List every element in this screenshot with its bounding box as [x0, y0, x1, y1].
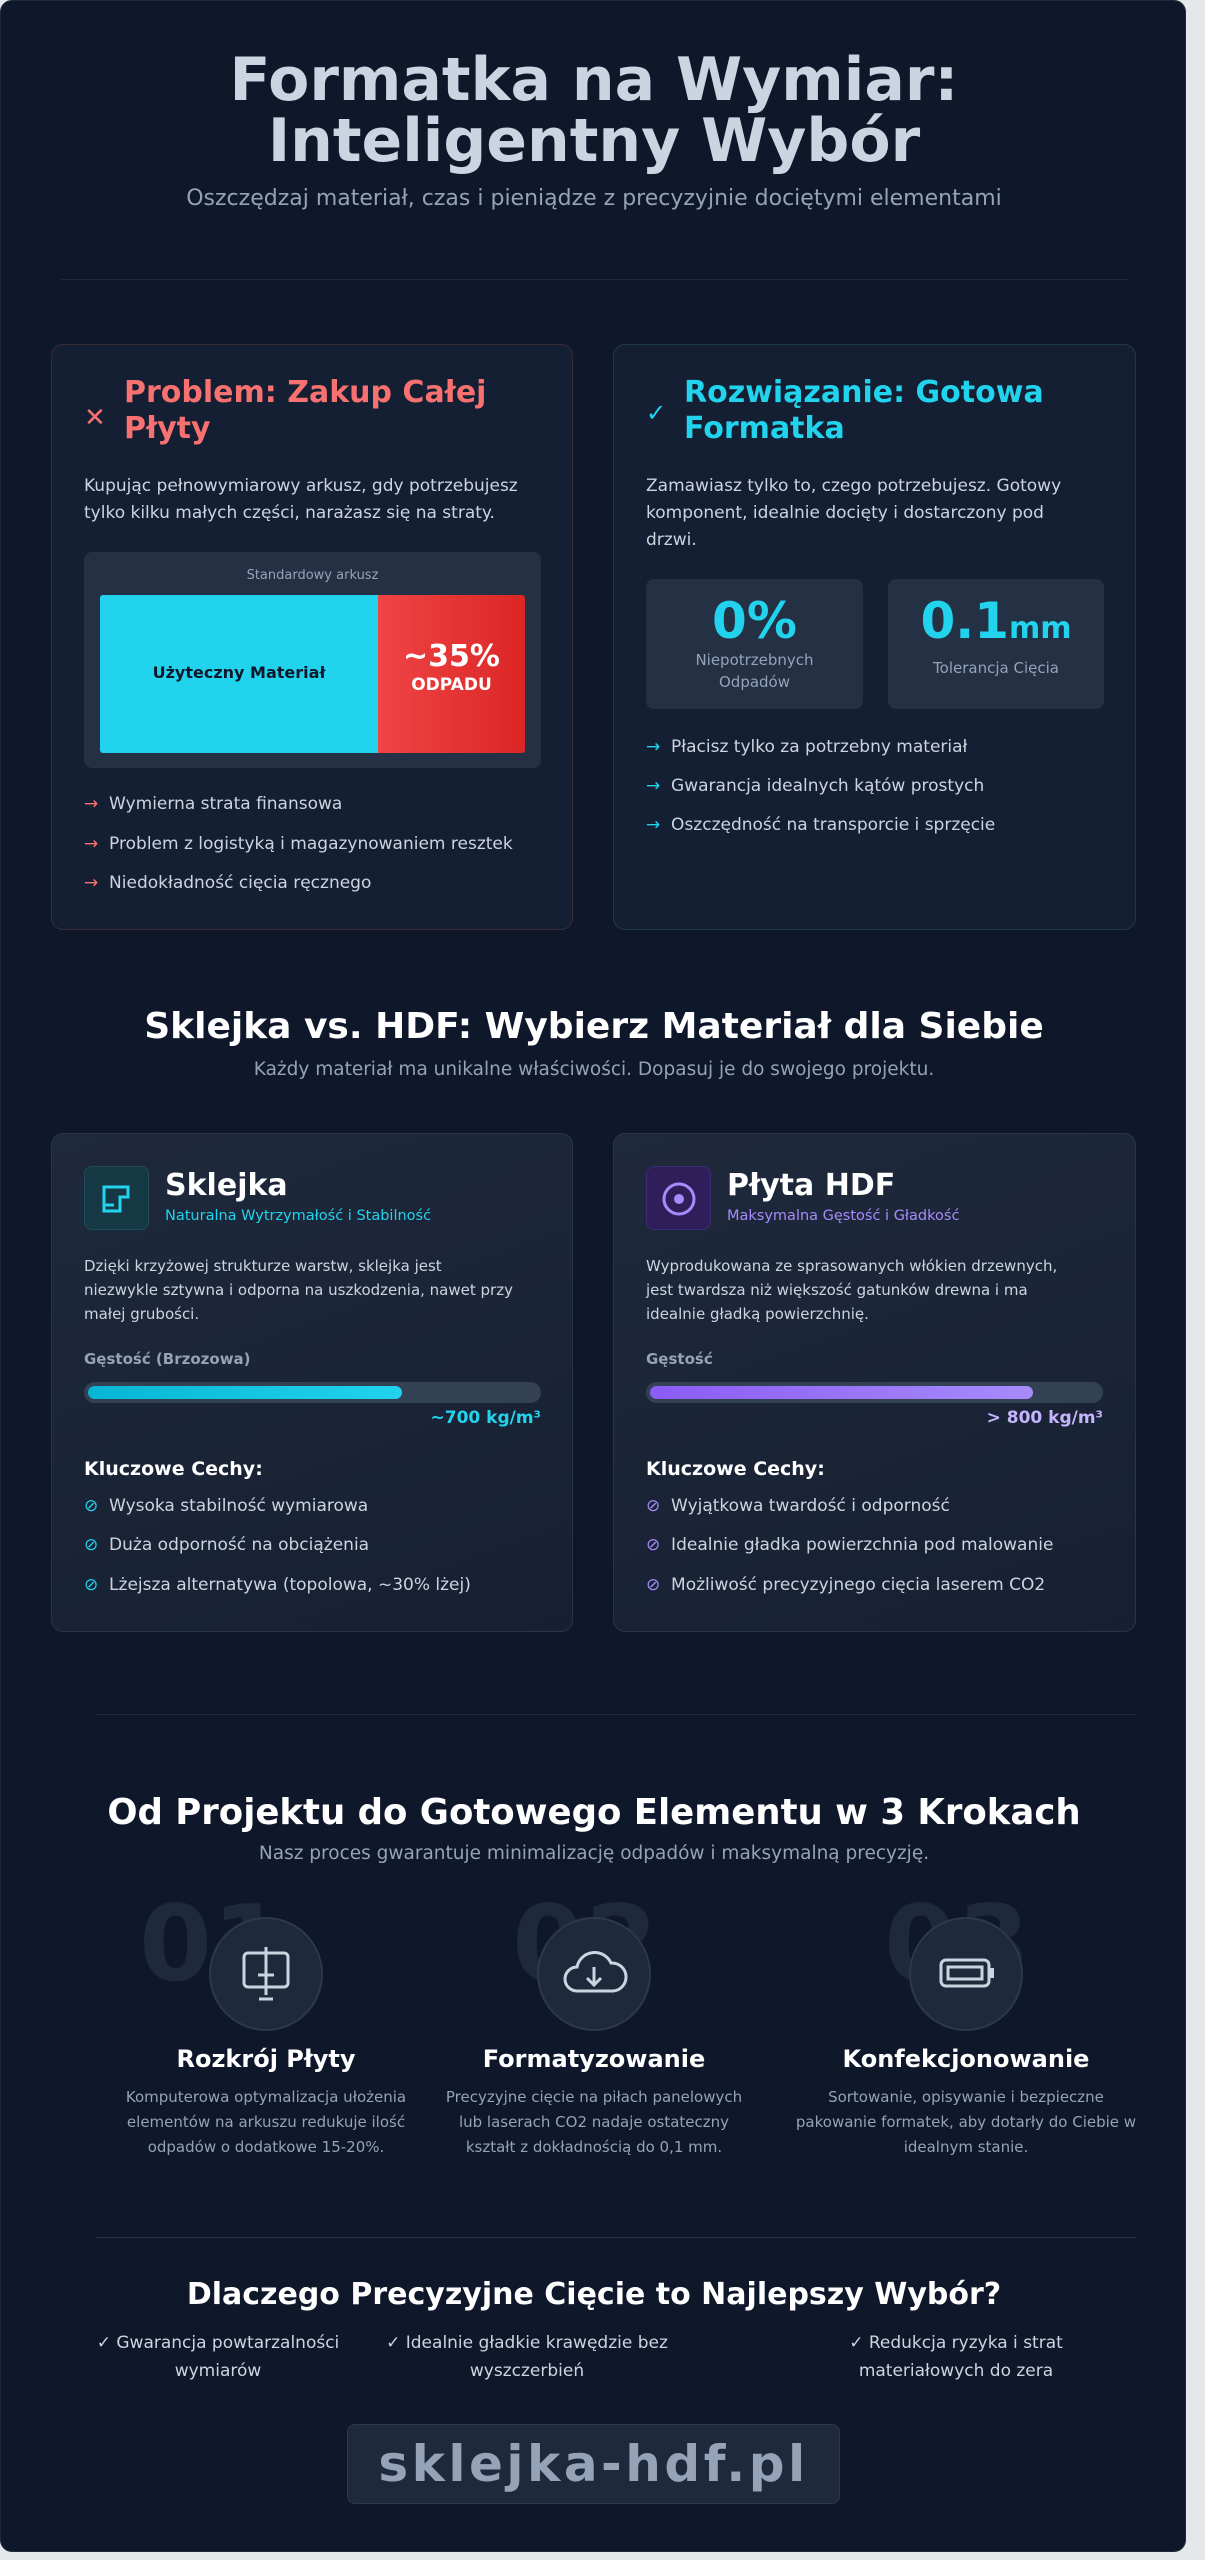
stat: 0%: Odpadów [719, 673, 790, 691]
panel: problem [51, 344, 573, 930]
text: sklejka: niezwykle sztywna i odporna na uszkodzenia, nawet przy małej grubości. [84, 1281, 513, 1323]
heading: solution: Rozwiązanie: Gotowa Formatka [684, 375, 1044, 446]
heading: steps: Od Projektu do Gotowego Elementu w 3 Krokach [107, 1792, 1081, 1833]
list: benefits [646, 737, 995, 835]
step 3 [796, 1883, 1136, 2156]
features: sklejka: ⊘ Duża odporność na obciążenia [84, 1535, 369, 1555]
usable bar [100, 595, 378, 753]
title: Formatka na Wymiar: [230, 45, 958, 115]
panel: hdf: Maksymalna Gęstość i Gładkość [727, 1208, 959, 1224]
step 2 [446, 1883, 742, 2156]
why list: ✓ Redukcja ryzyka i strat materiałowych do zera [849, 2333, 1063, 2381]
chart: sheet [84, 552, 541, 768]
features: hdf: Kluczowe Cechy: [646, 1458, 825, 1480]
heading: problem: Problem: Zakup Całej Płyty [124, 375, 486, 446]
text: problem: Kupując pełnowymiarowy arkusz, gdy potrzebujesz tylko kilku małych części, narażasz się na straty. [84, 476, 518, 523]
footer: brand [347, 2424, 840, 2504]
stat: 0.1mm: Tolerancja Cięcia [933, 659, 1059, 677]
list: problems [84, 794, 513, 893]
features: sklejka: ⊘ Wysoka stabilność wymiarowa [84, 1496, 368, 1516]
chart: density sklejka [84, 1350, 541, 1428]
subtitle: Oszczędzaj materiał, czas i pieniądze z precyzyjnie dociętymi elementami [186, 186, 1002, 211]
waste bar: ~35% [403, 639, 500, 674]
waste bar: ODPADU [411, 675, 492, 695]
features: hdf [646, 1458, 1053, 1595]
text: sklejka: Dzięki krzyżowej strukturze warstw, sklejka jest [84, 1257, 442, 1275]
panel: problem: → Niedokładność cięcia ręcznego [84, 873, 371, 893]
panel: solution: → Płacisz tylko za potrzebny materiał [646, 737, 967, 757]
stat: 0%: 0% [712, 592, 797, 650]
waste bar [378, 595, 525, 753]
chart: density hdf: > 800 kg/m³ [987, 1408, 1103, 1428]
stat: 0% [646, 579, 863, 709]
chart: density sklejka: Gęstość (Brzozowa) [84, 1350, 251, 1368]
subheading: materials: Każdy materiał ma unikalne właściwości. Dopasuj je do swojego projektu. [254, 1059, 934, 1080]
icon: sklejka [84, 1166, 149, 1230]
panel: solution: → Oszczędność na transporcie i sprzęcie [646, 815, 995, 835]
step 1 [126, 1883, 406, 2156]
footer: brand: sklejka-hdf.pl [378, 2435, 809, 2493]
why list [97, 2333, 1063, 2381]
icon: monitor [209, 1917, 323, 2031]
text: hdf: Wyprodukowana ze sprasowanych włókien drzewnych, jest twardsza niż większość gatunków drewna i ma idealnie gładką powierzchnię. [646, 1257, 1057, 1323]
icon: battery [909, 1917, 1023, 2031]
icon: check: ✓ [646, 399, 666, 427]
stat: 0.1mm [888, 579, 1104, 709]
panel: problem: → Problem z logistyką i magazynowaniem resztek [84, 834, 513, 854]
step 1: Rozkrój Płyty [176, 2045, 356, 2073]
features: sklejka: Kluczowe Cechy: [84, 1458, 263, 1480]
step 3: Sortowanie, opisywanie i bezpieczne pakowanie formatek, aby dotarły do Ciebie w idealnym stanie. [796, 2088, 1136, 2156]
panel: solution [613, 344, 1136, 930]
chart: density hdf [646, 1350, 1103, 1428]
step 2: Precyzyjne cięcie na piłach panelowych lub laserach CO2 nadaje ostateczny kształt z dokładnością do 0,1 mm. [446, 2088, 742, 2156]
title: hdf: Płyta HDF [727, 1168, 895, 1203]
subheading: steps: Nasz proces gwarantuje minimalizację odpadów i maksymalną precyzję. [259, 1843, 929, 1864]
heading: materials: Sklejka vs. HDF: Wybierz Materiał dla Siebie [144, 1006, 1044, 1047]
features: hdf: ⊘ Wyjątkowa twardość i odporność [646, 1496, 950, 1516]
chart: density hdf: Gęstość [646, 1350, 713, 1368]
why list: ✓ Gwarancja powtarzalności wymiarów [97, 2333, 339, 2381]
panel: sklejka: Naturalna Wytrzymałość i Stabilność [165, 1208, 431, 1224]
step 3: 03 [884, 1883, 1030, 2005]
text: sklejka [84, 1257, 513, 1323]
step 2: Formatyzowanie [483, 2045, 705, 2073]
features: hdf: ⊘ Możliwość precyzyjnego cięcia laserem CO2 [646, 1575, 1045, 1595]
icon: x: ✕ [84, 403, 106, 433]
chart: density sklejka: ~700 kg/m³ [430, 1408, 541, 1428]
icon: cloud [537, 1917, 651, 2031]
chart: sheet: Standardowy arkusz [247, 568, 378, 583]
features: hdf: ⊘ Idealnie gładka powierzchnia pod malowanie [646, 1535, 1053, 1555]
step 1: Komputerowa optymalizacja ułożenia elementów na arkuszu redukuje ilość odpadów o dodatkowe 15-20%. [126, 2088, 406, 2156]
panel: problem: → Wymierna strata finansowa [84, 794, 342, 814]
title: sklejka: Sklejka [165, 1168, 288, 1203]
title: Inteligentny Wybór [268, 106, 920, 176]
usable bar: Użyteczny Materiał [153, 663, 325, 682]
panel: hdf [613, 1133, 1136, 1632]
stat: 0%: Niepotrzebnych [695, 651, 814, 669]
panel: solution: → Gwarancja idealnych kątów prostych [646, 776, 984, 796]
step 1: 01 [139, 1883, 285, 2005]
title [230, 45, 958, 176]
text: solution: Zamawiasz tylko to, czego potrzebujesz. Gotowy komponent, idealnie docięty i dostarczony pod drzwi. [646, 476, 1061, 550]
step 3: Konfekcjonowanie [843, 2045, 1089, 2073]
icon: hdf [646, 1166, 711, 1230]
step 2: 02 [512, 1883, 658, 2005]
heading: why: Dlaczego Precyzyjne Cięcie to Najlepszy Wybór? [187, 2277, 1001, 2312]
stat: 0.1mm: 0.1mm [920, 592, 1072, 650]
features: sklejka: ⊘ Lżejsza alternatywa (topolowa, ~30% lżej) [84, 1575, 471, 1595]
why list: ✓ Idealnie gładkie krawędzie bez wyszczerbień [386, 2333, 668, 2381]
panel: sklejka [51, 1133, 573, 1632]
features: sklejka [84, 1458, 471, 1595]
